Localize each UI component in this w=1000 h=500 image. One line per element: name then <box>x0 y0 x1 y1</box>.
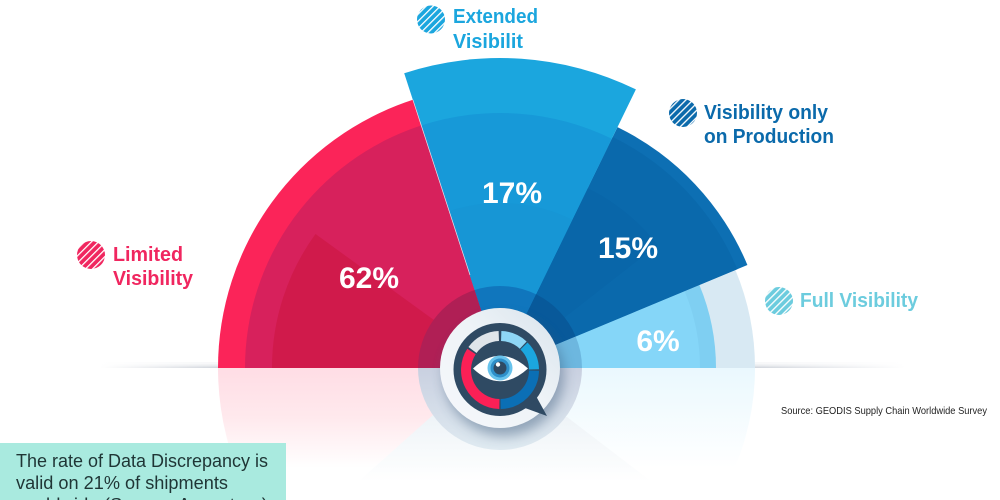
percentage: 17%: 17% <box>482 177 542 210</box>
callout: data discrepancy: valid on 21% of shipments <box>16 472 228 493</box>
callout: data discrepancy: The rate of Data Discrepancy is <box>16 450 268 471</box>
segment: extended visibility <box>404 58 636 368</box>
legend: limited visibility <box>77 241 194 290</box>
legend: limited visibility: Visibility <box>113 268 194 290</box>
legend: visibility only on production <box>669 99 834 148</box>
legend: limited visibility: Limited <box>113 244 183 266</box>
legend: full visibility <box>765 287 919 315</box>
percentage: 6%: 6% <box>636 325 680 358</box>
percentage: 15%: 15% <box>598 232 658 265</box>
horizon shadow <box>100 362 905 368</box>
semicircle chart <box>218 58 755 368</box>
legend: visibility only on production: Visibility only <box>704 102 829 124</box>
legend: extended visibility <box>417 6 538 53</box>
segment: visibility only on production <box>500 127 747 368</box>
legend: extended visibility: Extended <box>453 6 538 28</box>
legend: full visibility: Full Visibility <box>800 290 919 312</box>
legend: extended visibility: Visibilit <box>453 31 523 53</box>
percentage: 62%: 62% <box>339 262 399 295</box>
reflection below the horizon <box>218 368 755 500</box>
segment: limited visibility <box>218 100 500 368</box>
inner dark ring <box>418 286 582 368</box>
legend: visibility only on production: on Production <box>704 126 834 148</box>
callout: data discrepancy <box>0 443 286 500</box>
segment: full visibility <box>500 270 755 368</box>
icon: eye in magnifier <box>440 308 564 436</box>
